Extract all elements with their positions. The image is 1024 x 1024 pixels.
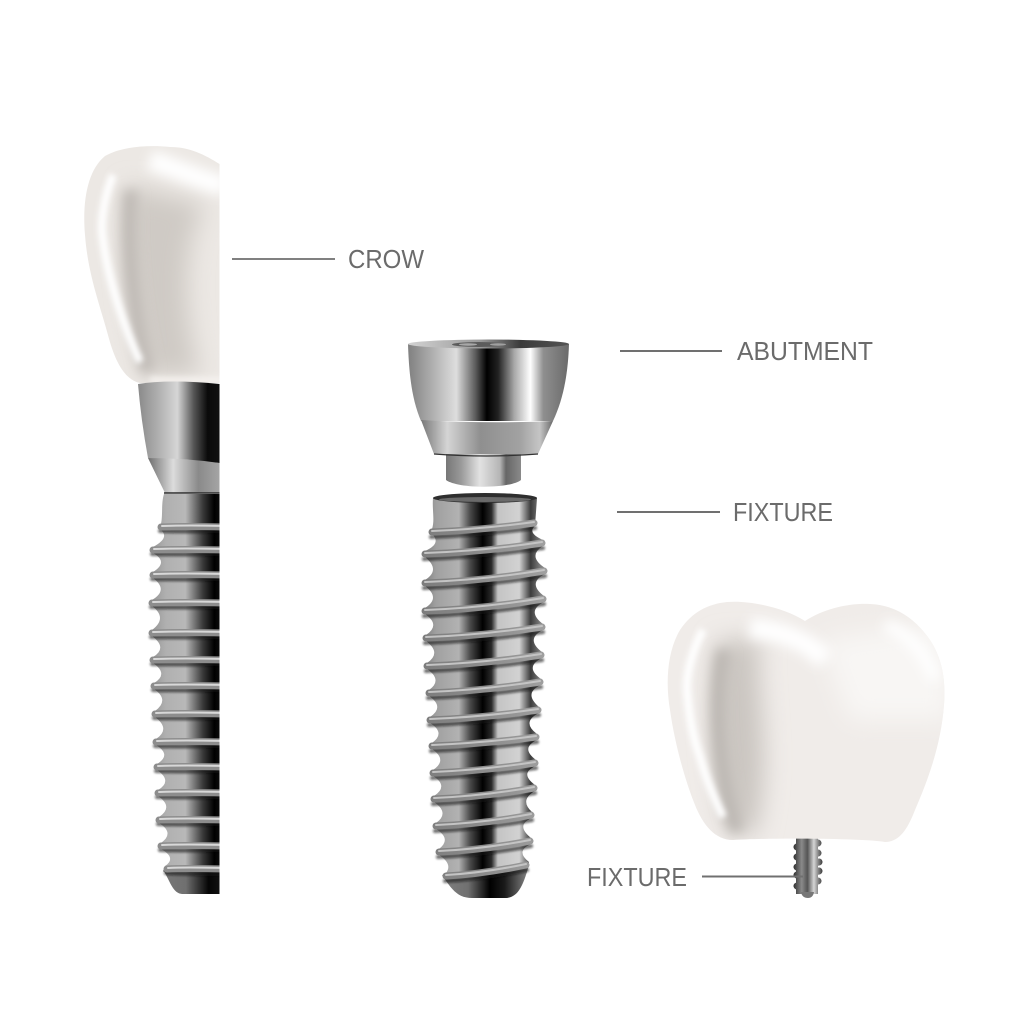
label: fixture: FIXTURE (733, 497, 833, 527)
label: small fixture: FIXTURE (587, 862, 687, 892)
fixture body, half section (152, 494, 220, 872)
panel: half-section implant with crown (80, 140, 225, 894)
abutment, half section (138, 382, 220, 493)
fixture body (425, 498, 545, 873)
molar crown (660, 595, 955, 845)
fixture top opening (433, 493, 537, 503)
label: abutment: ABUTMENT (737, 336, 873, 366)
small fixture (796, 838, 819, 898)
abutment (408, 340, 569, 487)
fixture threads (424, 522, 545, 881)
fixture threads, half section (151, 526, 222, 874)
crown, half section (80, 140, 225, 385)
panel: molar crown with small fixture (660, 595, 955, 898)
panel: exploded implant (408, 340, 569, 898)
fixture tip (442, 865, 529, 898)
label: crown: CROW (348, 244, 424, 274)
fixture tip, half section (163, 870, 220, 894)
